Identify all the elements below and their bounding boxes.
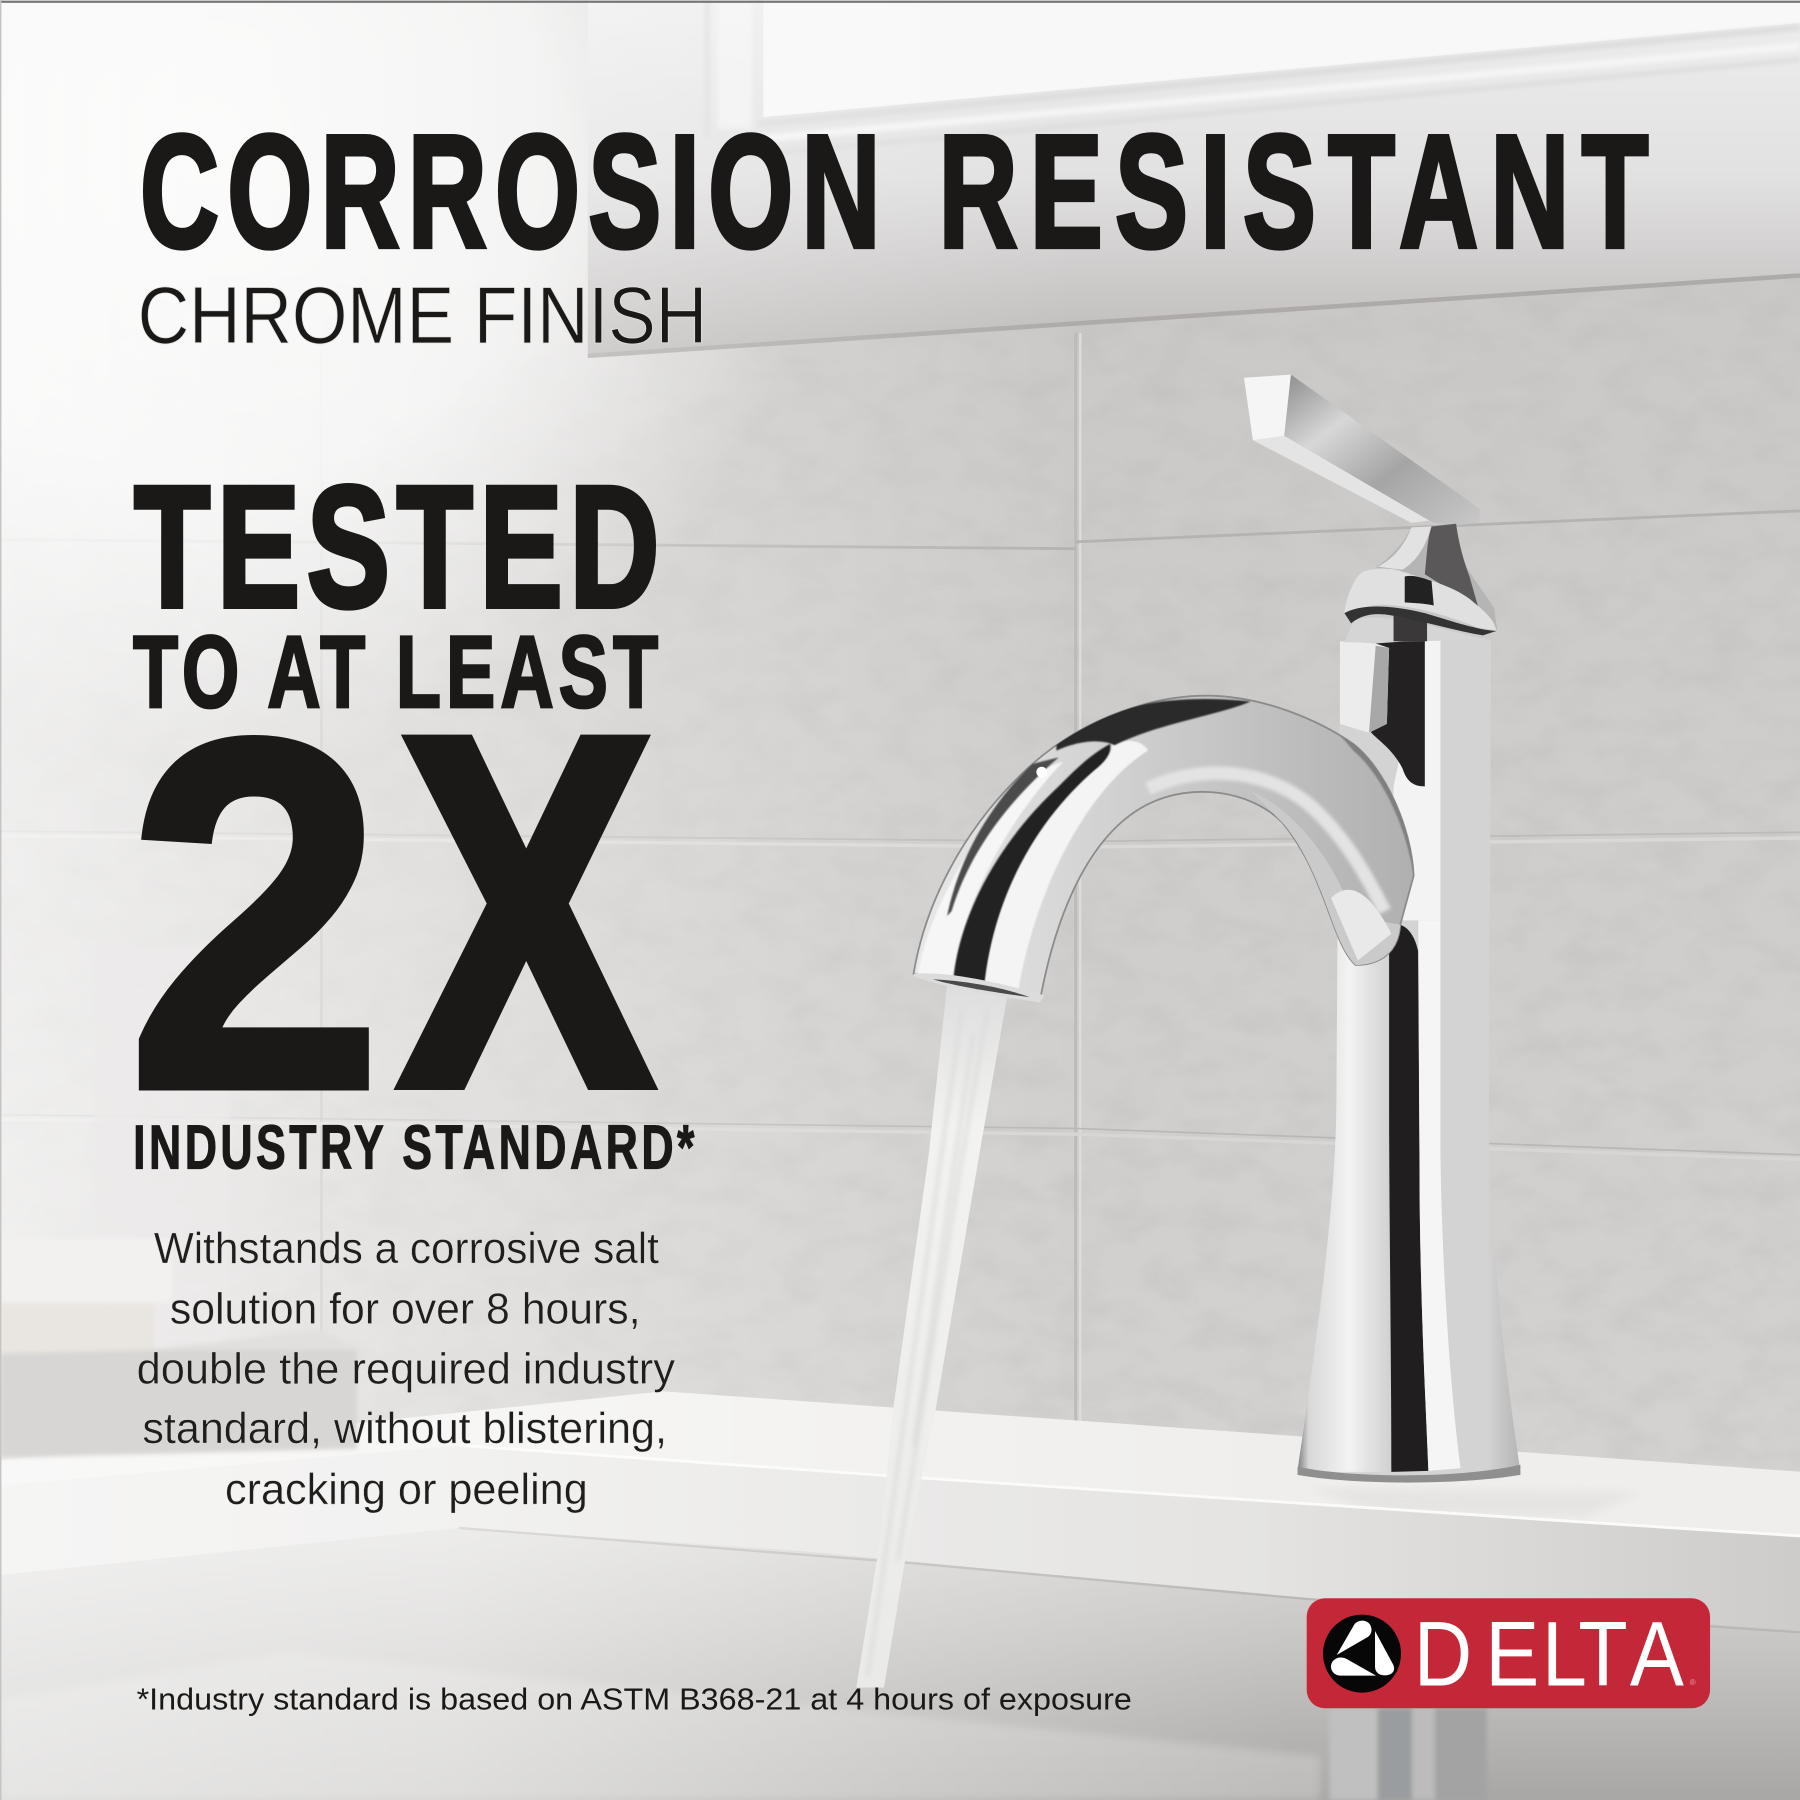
counter top [0,1391,1800,1538]
title: corrosion resistant: RESISTANT [939,103,1661,282]
nozzle rim [914,973,1044,1002]
claim: tested to at least 2x industry standard [126,450,694,1194]
faucet upper column, spout and handle [914,375,1497,1002]
basin sheen [0,1653,1320,1800]
white fade at top left [0,0,918,804]
white band [985,741,1148,990]
body text: standard, without blistering, [142,1405,667,1453]
water stream [856,986,1009,1688]
lower elbow highlight [1251,791,1400,965]
numeral 2: 2 [126,636,384,1194]
logo: delta [1307,1598,1710,1708]
counter front edge [0,1445,1800,1630]
spout [914,696,1414,996]
body text: cracking or peeling [225,1466,588,1514]
sparkle highlight [1036,767,1047,777]
body text: Withstands a corrosive salt [154,1225,659,1273]
body text [137,1225,675,1514]
mirror glass [763,0,1800,117]
faucet [856,375,1520,1688]
title: corrosion resistant: CORROSION [140,103,889,282]
logo badge [1307,1598,1710,1708]
inner light arc [1148,773,1385,911]
registered mark: ® [1690,1678,1696,1687]
left highlight [918,762,1063,976]
tile grout lines [0,333,1800,1423]
spout reflections [918,699,1414,990]
elbow shadow [1341,737,1412,869]
icon: delta triangle mark [1323,1615,1401,1693]
bottle [94,946,230,1342]
tray [0,1345,357,1458]
body text: double the required industry [137,1345,675,1393]
handle neck [1376,524,1497,630]
to at least: TO AT LEAST [133,614,658,729]
frame lower edge [588,276,1800,356]
mirror frame [588,0,1800,356]
white fade over vanity [2,1405,1102,1800]
letter x: X [401,636,653,1188]
left image border [0,0,2,1800]
wall texture [0,276,1800,1492]
body text: solution for over 8 hours, [170,1286,641,1334]
subtitle: chrome finish: CHROME FINISH [138,271,707,361]
counter reflection [1309,1488,1642,1518]
top dark band [1056,699,1251,751]
dark reflection band [954,744,1110,983]
handle lever [1244,375,1481,525]
jar lid [0,1239,172,1303]
handle collar [1344,569,1496,643]
outer dark edge [947,757,1059,916]
background props: bottle, jar and tray [0,946,357,1458]
faucet reflection in basin [1329,1708,1487,1800]
logo wordmark: DELTA [1414,1604,1684,1706]
industry standard: INDUSTRY STANDARD* [133,1114,694,1182]
top image border [0,1,1800,3]
frame moulding [707,0,1800,155]
footnote: *Industry standard is based on ASTM B368-21 at 4 hours of exposure [137,1681,1132,1716]
upper column [1338,640,1491,920]
tested: TESTED [134,450,659,643]
faucet lower body [1298,900,1520,1483]
tray top [149,1329,357,1350]
jar base [0,1303,154,1353]
vanity basin [0,1515,1800,1800]
